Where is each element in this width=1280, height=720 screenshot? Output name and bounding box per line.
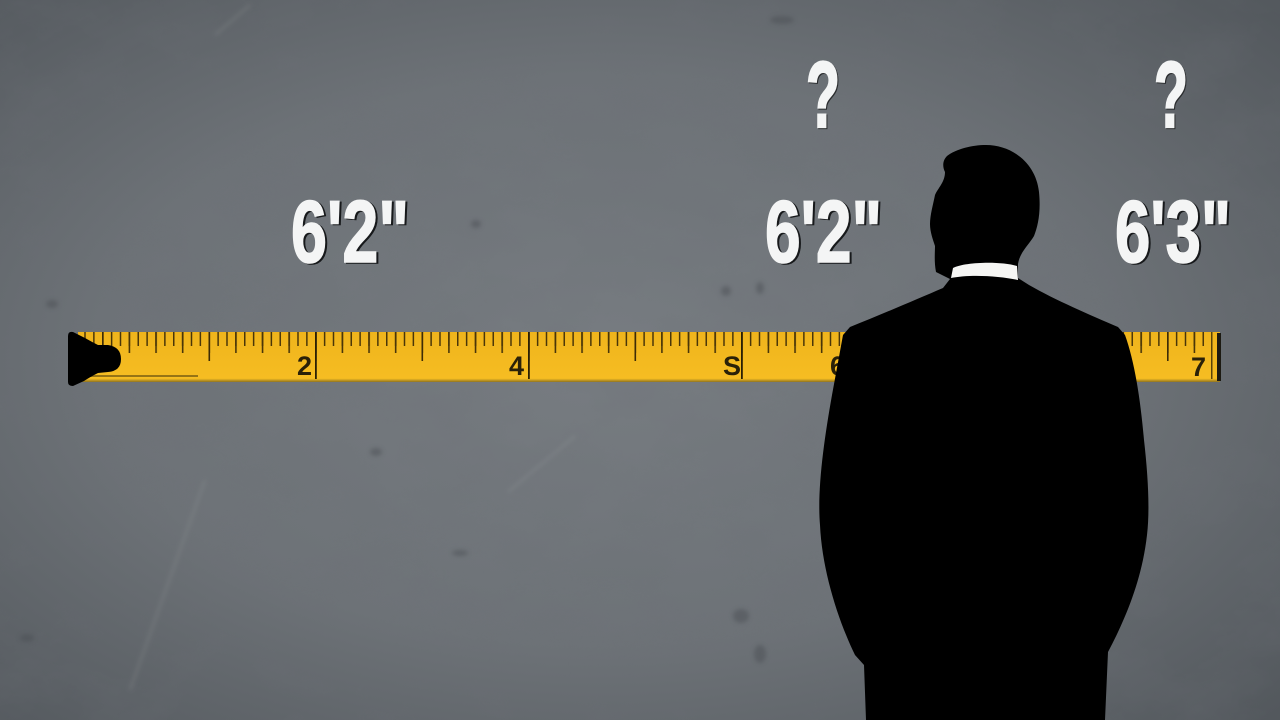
question mark above 6'2": ? (806, 42, 840, 147)
tape numbers: S (723, 351, 741, 381)
height label: 6'2" centre: 6'2" (765, 182, 882, 281)
tape numbers (297, 351, 1206, 382)
tape numbers: 4 (509, 351, 524, 381)
tape tick marks (78, 332, 1212, 382)
question mark above 6'3": ? (1154, 42, 1188, 147)
height label: 6'3" right: 6'3" (1115, 182, 1231, 281)
tape numbers: 7 (1191, 352, 1206, 382)
tape numbers: 6 (830, 351, 845, 381)
tape hook (68, 332, 121, 386)
measuring tape (68, 332, 1221, 386)
tape end cap (1217, 333, 1221, 381)
silhouette: man in suit seen from behind (819, 145, 1148, 720)
tape body (78, 332, 1220, 382)
tape numbers: 2 (297, 351, 312, 381)
fine print (90, 375, 198, 377)
white shirt collar (951, 263, 1018, 280)
height label: 6'2" left: 6'2" (291, 182, 409, 281)
